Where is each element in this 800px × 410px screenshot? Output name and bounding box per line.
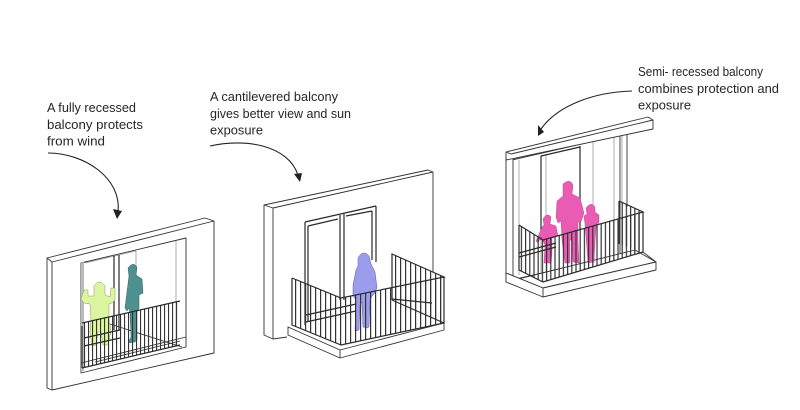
figure: child right in pink: [584, 204, 599, 263]
text: cantilevered balcony: gives better view and sun: [210, 107, 351, 121]
figure: child left in pink: [536, 215, 558, 263]
railing: [519, 201, 643, 282]
back wall and columns: [512, 135, 620, 280]
text: semi-recessed balcony: Semi- recessed balcony: [638, 65, 764, 79]
arrow: to recessed balcony: [48, 153, 122, 219]
text: cantilevered balcony: A cantilevered balcony: [210, 90, 339, 104]
figure: person in yellow-green: [81, 282, 115, 346]
figure: person in teal: [125, 264, 143, 343]
figure: adult in pink: [556, 181, 584, 263]
slab: [506, 250, 656, 288]
text: cantilevered balcony: exposure: [210, 124, 263, 138]
text: semi-recessed balcony: exposure: [638, 98, 691, 112]
arrow: to cantilevered balcony: [210, 143, 302, 182]
beam: [506, 117, 653, 160]
opening: [81, 238, 186, 373]
figure: person in purple: [353, 253, 377, 331]
railing: [82, 301, 180, 368]
text: fully recessed balcony: from wind: [47, 134, 105, 148]
text: fully recessed balcony: balcony protects: [47, 118, 143, 132]
railing: [292, 254, 444, 345]
balcony: fully recessed: [47, 218, 214, 390]
door: [305, 206, 376, 325]
balcony: cantilevered: [264, 170, 444, 358]
balcony: semi-recessed: [506, 117, 656, 297]
wall: [264, 170, 433, 339]
text: fully recessed balcony: A fully recessed: [47, 101, 136, 115]
arrow: to semi-recessed balcony: [538, 91, 632, 136]
slab: [288, 323, 444, 358]
text: semi-recessed balcony: combines protection and: [638, 82, 779, 96]
wall: [47, 218, 214, 390]
